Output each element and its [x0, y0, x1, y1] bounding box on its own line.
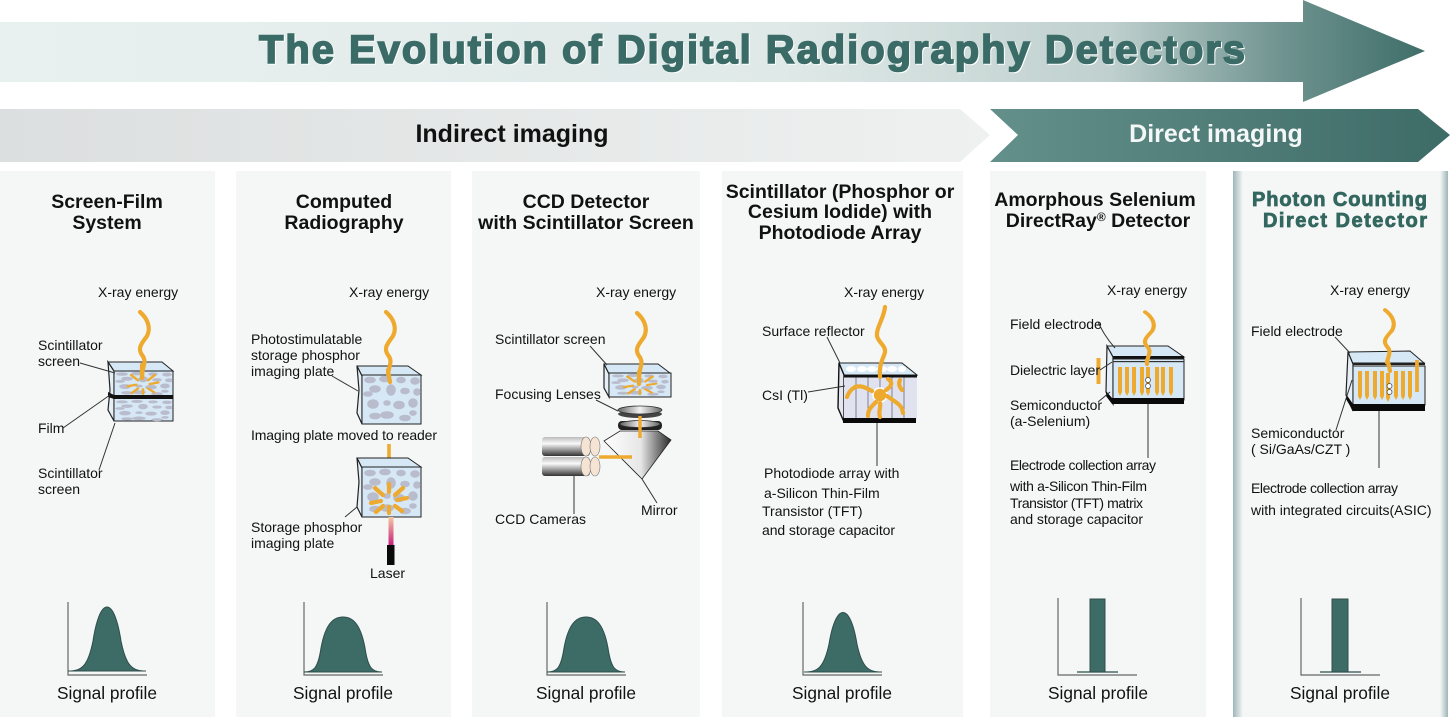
arrow: direct imaging: Direct imaging	[1129, 120, 1303, 148]
labels: Laser	[370, 565, 405, 581]
labels: Transistor (TFT)	[762, 503, 863, 519]
labels: X-ray energy	[98, 284, 178, 300]
heading: Photodiode Array	[759, 222, 922, 244]
labels: ( Si/GaAs/CZT )	[1251, 441, 1350, 457]
signal profile: Signal profile	[293, 683, 393, 703]
title: The Evolution of Digital Radiography Detectors	[259, 28, 1245, 72]
labels: CCD Cameras	[495, 511, 586, 527]
labels: Photodiode array with	[764, 465, 899, 481]
labels: Surface reflector	[762, 323, 865, 339]
heading: Computed	[296, 191, 392, 213]
heading: Direct Detector	[1263, 210, 1427, 232]
ccd diagram	[542, 313, 671, 514]
labels: Electrode collection array	[1010, 457, 1156, 473]
labels: screen	[38, 481, 80, 497]
detector diagram: exposure	[332, 312, 421, 424]
labels: X-ray energy	[1107, 282, 1187, 298]
labels: Scintillator screen	[495, 331, 606, 347]
labels	[762, 284, 924, 538]
detector diagram	[1335, 310, 1425, 468]
labels: X-ray energy	[596, 284, 676, 300]
labels: Film	[38, 420, 64, 436]
labels: with integrated circuits(ASIC)	[1250, 502, 1432, 518]
signal profile	[792, 602, 892, 703]
panel: scintillator with photodiode array	[722, 171, 963, 717]
detector diagram	[808, 307, 917, 466]
labels: Semiconductor	[1010, 397, 1102, 413]
labels: Imaging plate moved to reader	[251, 427, 437, 443]
labels: Focusing Lenses	[495, 386, 601, 402]
signal profile	[293, 602, 393, 703]
labels: Photostimulatable	[251, 331, 363, 347]
labels: Scintillator	[38, 465, 103, 481]
signal profile: Signal profile	[536, 683, 636, 703]
signal profile: Signal profile	[1048, 683, 1148, 703]
signal profile	[536, 602, 636, 703]
signal profile: Signal profile	[57, 683, 157, 703]
heading: Screen-Film	[51, 191, 163, 213]
heading: CCD Detector	[523, 191, 650, 213]
labels: Field electrode	[1251, 323, 1343, 339]
labels: imaging plate	[251, 363, 334, 379]
arrow: direct imaging	[990, 109, 1450, 162]
heading: Radiography	[284, 212, 404, 234]
heading: System	[72, 212, 142, 234]
labels: and storage capacitor	[762, 522, 895, 538]
labels: Scintillator	[38, 337, 103, 353]
detector diagram	[1096, 312, 1184, 458]
panel: photon counting direct detector	[1233, 171, 1448, 717]
panel: amorphous selenium directray detector	[990, 171, 1206, 717]
heading: with Scintillator Screen	[477, 212, 694, 234]
labels: Electrode collection array	[1251, 480, 1398, 496]
panel: computed radiography	[236, 171, 451, 717]
heading: Detector	[1106, 210, 1191, 232]
labels: imaging plate	[251, 535, 334, 551]
labels: a-Silicon Thin-Film	[764, 485, 880, 501]
signal profile: Signal profile	[1290, 683, 1390, 703]
labels: and storage capacitor	[1010, 511, 1143, 527]
heading: Scintillator (Phosphor or	[726, 181, 955, 203]
heading: Amorphous Selenium	[994, 189, 1196, 211]
labels	[495, 284, 678, 527]
labels: X-ray energy	[1330, 282, 1410, 298]
heading: Photon Counting	[1252, 189, 1427, 211]
detector diagram: reader	[345, 444, 421, 565]
heading: Cesium Iodide) with	[748, 201, 932, 223]
labels: Mirror	[641, 502, 678, 518]
labels: X-ray energy	[349, 284, 429, 300]
labels: CsI (Tl)	[762, 387, 808, 403]
labels: Field electrode	[1010, 316, 1102, 332]
labels: Transistor (TFT) matrix	[1010, 495, 1143, 511]
signal profile	[1290, 598, 1390, 703]
signal profile	[57, 602, 157, 703]
labels: Semiconductor	[1251, 425, 1345, 441]
labels: Storage phosphor	[251, 519, 363, 535]
panel: screen-film system	[0, 171, 215, 717]
labels: storage phosphor	[251, 347, 360, 363]
detector diagram	[63, 312, 173, 470]
signal profile	[1048, 598, 1148, 703]
title arrow banner	[0, 0, 1425, 102]
heading: ®	[1097, 210, 1106, 224]
heading: DirectRay	[1006, 210, 1191, 232]
labels: X-ray energy	[844, 284, 924, 300]
labels: (a-Selenium)	[1010, 413, 1090, 429]
signal profile: Signal profile	[792, 683, 892, 703]
labels	[1250, 282, 1432, 518]
panel: ccd detector	[472, 171, 700, 717]
labels: Dielectric layer	[1010, 362, 1100, 378]
arrow: indirect imaging	[0, 109, 990, 162]
labels: with a-Silicon Thin-Film	[1009, 478, 1147, 494]
labels: screen	[38, 353, 80, 369]
labels	[1009, 282, 1187, 527]
labels	[251, 284, 437, 581]
labels	[38, 284, 178, 497]
arrow: indirect imaging: Indirect imaging	[415, 120, 609, 148]
